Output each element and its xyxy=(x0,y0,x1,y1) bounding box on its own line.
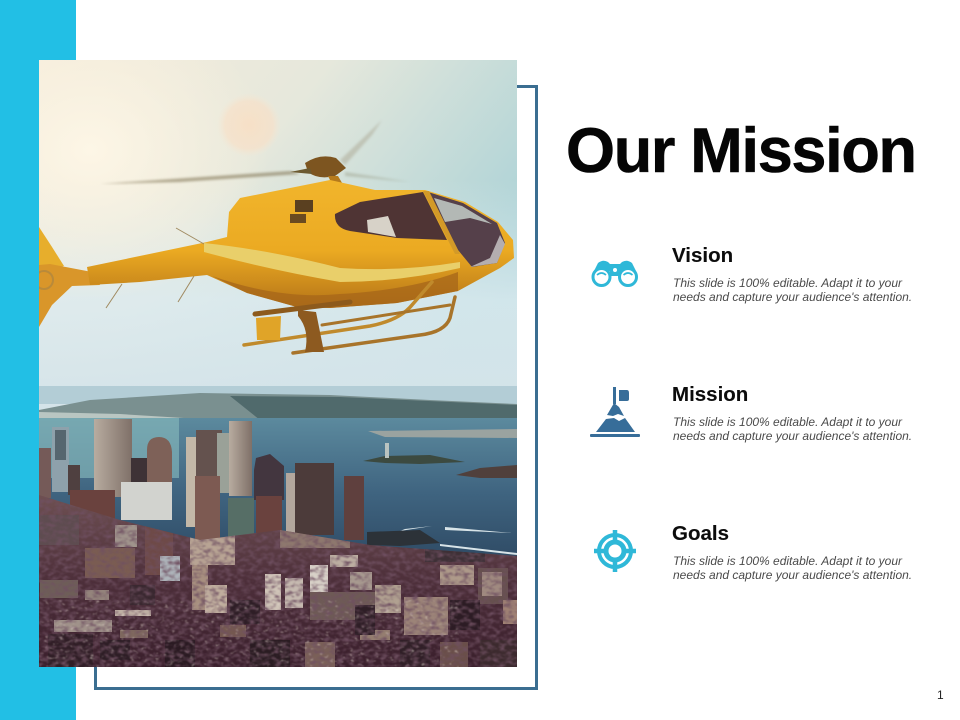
text: Mission description xyxy=(673,415,912,443)
heading: Vision: Vision xyxy=(672,244,733,267)
antennas xyxy=(106,228,204,308)
icon: target xyxy=(594,530,636,572)
text: Vision description xyxy=(673,276,912,304)
text: Mission description: needs and capture your audience's attention. xyxy=(673,429,912,443)
text: Vision description: needs and capture your audience's attention. xyxy=(673,290,912,304)
text: Goals description xyxy=(673,554,912,582)
text: Vision description: This slide is 100% editable. Adapt it to your xyxy=(673,276,902,290)
sky xyxy=(0,0,517,420)
dense city blocks xyxy=(39,495,517,667)
text: Mission description: This slide is 100% editable. Adapt it to your xyxy=(673,415,902,429)
landing skids xyxy=(244,282,455,353)
left accent bar xyxy=(0,0,76,720)
text: Goals description: This slide is 100% editable. Adapt it to your xyxy=(673,554,902,568)
harbor water xyxy=(39,418,517,568)
photo frame outline xyxy=(94,85,538,690)
icon: binoculars xyxy=(592,260,638,287)
title: Our Mission xyxy=(566,116,916,186)
heading: Goals: Goals xyxy=(672,522,729,545)
photo: helicopter over city xyxy=(39,60,517,667)
fuselage xyxy=(87,180,514,308)
helicopter xyxy=(35,120,514,353)
tail fin xyxy=(39,227,64,270)
page number: 1 xyxy=(937,688,944,702)
rotor blades xyxy=(100,120,410,200)
distant shore xyxy=(39,386,517,430)
cockpit windows xyxy=(335,191,505,267)
skyline towers xyxy=(39,419,440,570)
text: Goals description: needs and capture your audience's attention. xyxy=(673,568,912,582)
heading: Mission: Mission xyxy=(672,383,748,406)
icon: mountain with flag xyxy=(590,387,640,437)
